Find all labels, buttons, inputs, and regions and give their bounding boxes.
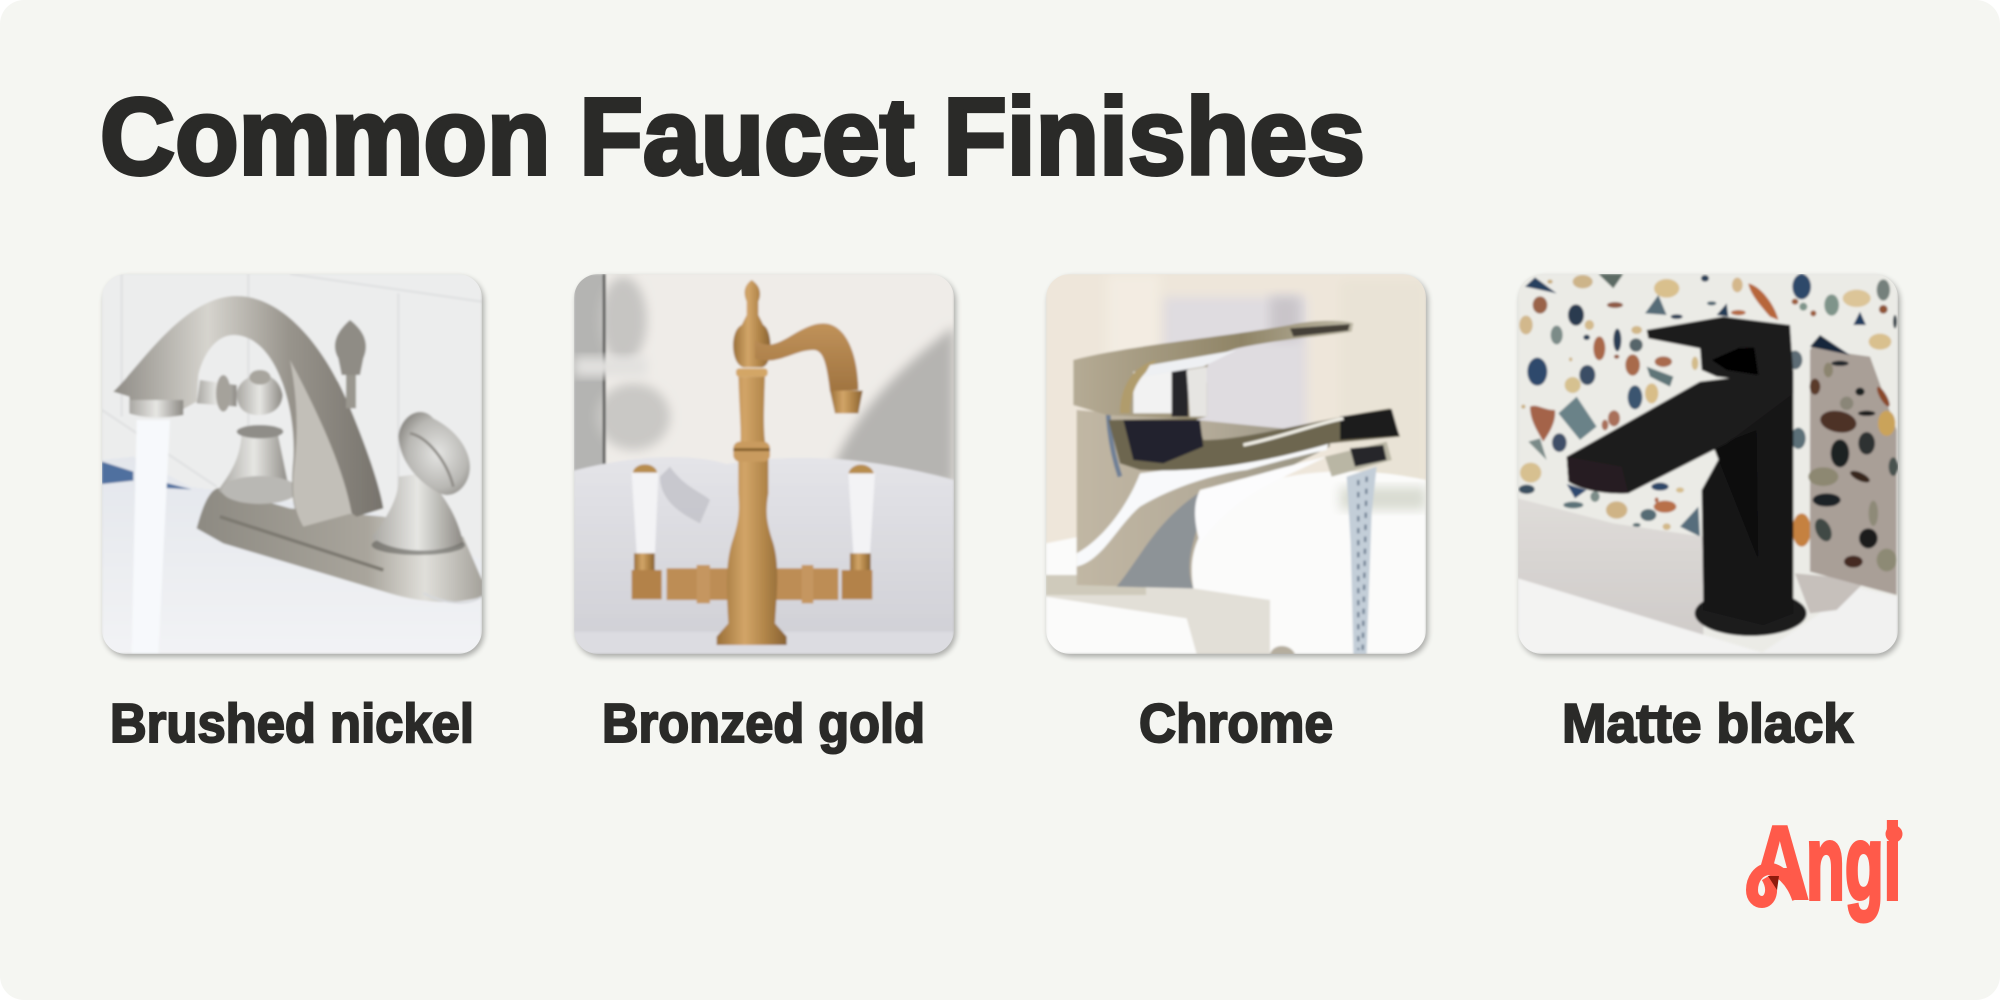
card: brushed nickel photo — [102, 274, 484, 657]
label: bronzed gold: Bronzed gold — [602, 692, 925, 754]
title: Common Faucet Finishes — [100, 76, 1365, 198]
logo: Angi — [1744, 803, 1902, 922]
logo: Angi: ngi — [1806, 803, 1901, 922]
logo: Angi: A — [1750, 804, 1810, 922]
card: chrome photo — [1046, 274, 1428, 657]
card: bronzed gold photo — [574, 274, 956, 657]
label: chrome: Chrome — [1139, 692, 1333, 754]
label: matte black: Matte black — [1562, 692, 1853, 754]
label: brushed nickel: Brushed nickel — [110, 692, 474, 754]
card: matte black photo — [1518, 274, 1900, 657]
